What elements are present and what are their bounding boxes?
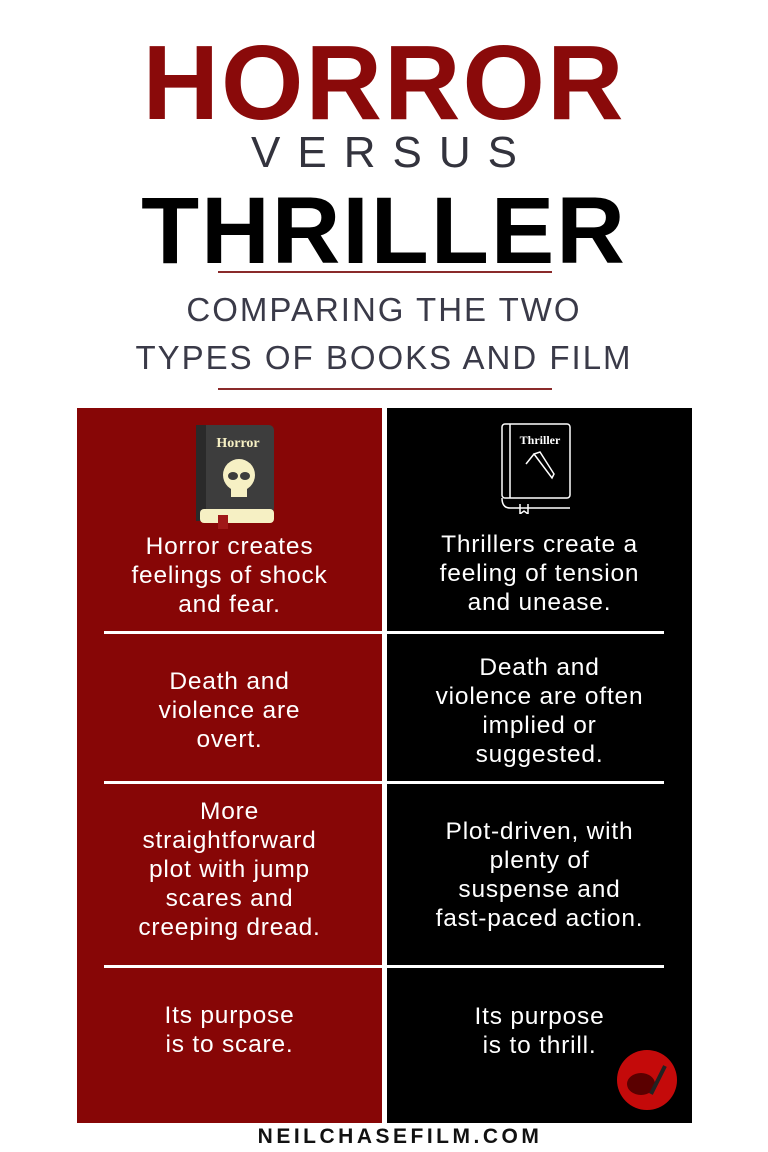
text: horror 4: is to scare.	[165, 1031, 294, 1058]
text: thriller 1	[440, 531, 639, 616]
text: thriller 3: Plot-driven, with	[446, 818, 633, 845]
icon: thriller book	[501, 423, 571, 514]
text: horror 4	[164, 1002, 294, 1058]
text: thriller 2: implied or	[482, 712, 597, 739]
text: horror 1: and fear.	[178, 591, 281, 618]
subtitle: TYPES OF BOOKS AND FILM	[135, 339, 633, 376]
text: horror 2: Death and	[169, 668, 290, 695]
subtitle	[135, 291, 633, 376]
subtitle: COMPARING THE TWO	[186, 291, 582, 328]
text: thriller 2: violence are often	[436, 683, 643, 710]
text: thriller 1: and unease.	[468, 589, 611, 616]
text: horror 3: creeping dread.	[138, 914, 321, 941]
footer: NEILCHASEFILM.COM	[258, 1125, 542, 1148]
text: horror 1: feelings of shock	[131, 562, 328, 589]
text: thriller 3: plenty of	[490, 847, 589, 874]
text: thriller 4: Its purpose	[474, 1003, 604, 1030]
text: horror 1: Horror creates	[146, 533, 313, 560]
icon: horror book	[196, 425, 274, 529]
icon: horror book: Horror	[216, 436, 260, 451]
title: HORROR: HORROR	[142, 24, 626, 142]
text: thriller 4: is to thrill.	[483, 1032, 596, 1059]
text: thriller 4	[474, 1003, 604, 1059]
text: horror 2: overt.	[196, 726, 263, 753]
text: horror 3: straightforward	[142, 827, 317, 854]
panel: horror	[77, 408, 382, 1123]
text: thriller 2	[436, 654, 643, 768]
text: thriller 1: Thrillers create a	[441, 531, 638, 558]
text: horror 1	[131, 533, 328, 618]
icon: logo	[617, 1050, 677, 1110]
text: horror 3	[138, 798, 321, 941]
text: thriller 2: Death and	[479, 654, 600, 681]
panel: thriller	[387, 408, 692, 1123]
text: horror 3: plot with jump	[149, 856, 310, 883]
text: horror 3: More	[200, 798, 259, 825]
text: thriller 3: suspense and	[458, 876, 621, 903]
text: horror 3: scares and	[166, 885, 293, 912]
title: VERSUS: VERSUS	[251, 128, 534, 177]
icon: thriller book: Thriller	[520, 433, 561, 447]
text: thriller 3	[436, 818, 643, 932]
text: thriller 3: fast-paced action.	[436, 905, 643, 932]
text: horror 4: Its purpose	[164, 1002, 294, 1029]
text: thriller 2: suggested.	[476, 741, 603, 768]
title: THRILLER: THRILLER	[141, 178, 627, 284]
text: horror 2	[158, 668, 300, 753]
text: thriller 1: feeling of tension	[440, 560, 639, 587]
text: horror 2: violence are	[159, 697, 300, 724]
